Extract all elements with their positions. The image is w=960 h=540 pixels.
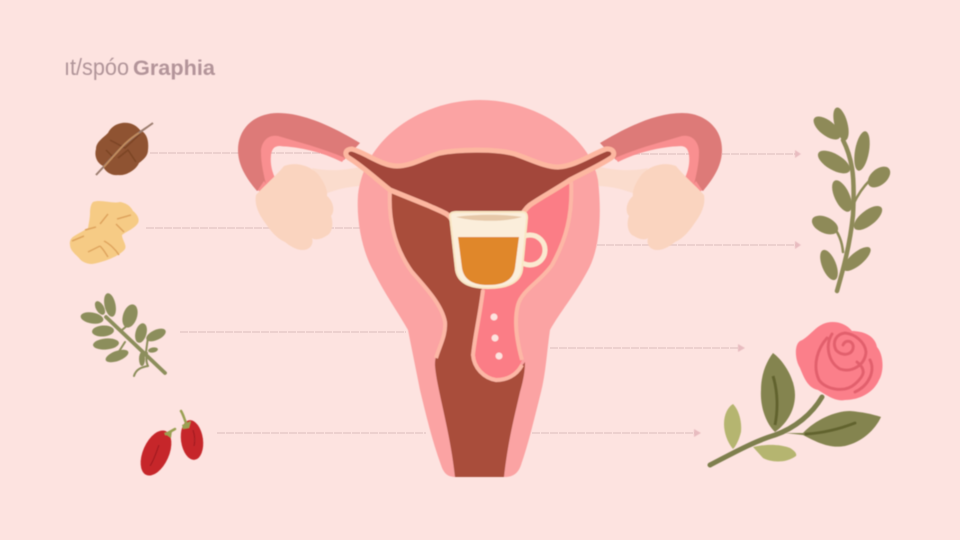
icon: rose with stem: [710, 322, 883, 465]
icon: pale walnut: [70, 201, 139, 264]
logo wordmark: ıt/spóo: [64, 54, 129, 80]
diagram: uterus and fallopian tubes: [238, 100, 722, 477]
right ovarian ligament: [596, 166, 648, 194]
logo wordmark: Graphia: [133, 55, 216, 80]
icon: goji berries: [134, 411, 206, 480]
logo wordmark: [64, 54, 216, 80]
dark lower cavity: [390, 190, 525, 477]
right ovary: [627, 164, 704, 250]
icon: olive leafy branch: [809, 106, 894, 291]
icon: brown walnut with twig: [95, 123, 153, 175]
uterus outer body: [358, 100, 600, 477]
dark fundus: [346, 149, 614, 220]
connector lines: [146, 153, 796, 433]
pink right cavity: [473, 180, 570, 380]
left fallopian tube: [238, 113, 360, 194]
right fallopian tube: [600, 113, 722, 194]
cervical canal: [473, 290, 522, 380]
teacup: [450, 212, 545, 288]
icon: green herb sprig: [80, 292, 168, 376]
left ovary: [256, 164, 333, 250]
left ovarian ligament: [312, 166, 364, 194]
cavity outline: [390, 180, 571, 360]
connector arrowheads: [694, 150, 801, 437]
